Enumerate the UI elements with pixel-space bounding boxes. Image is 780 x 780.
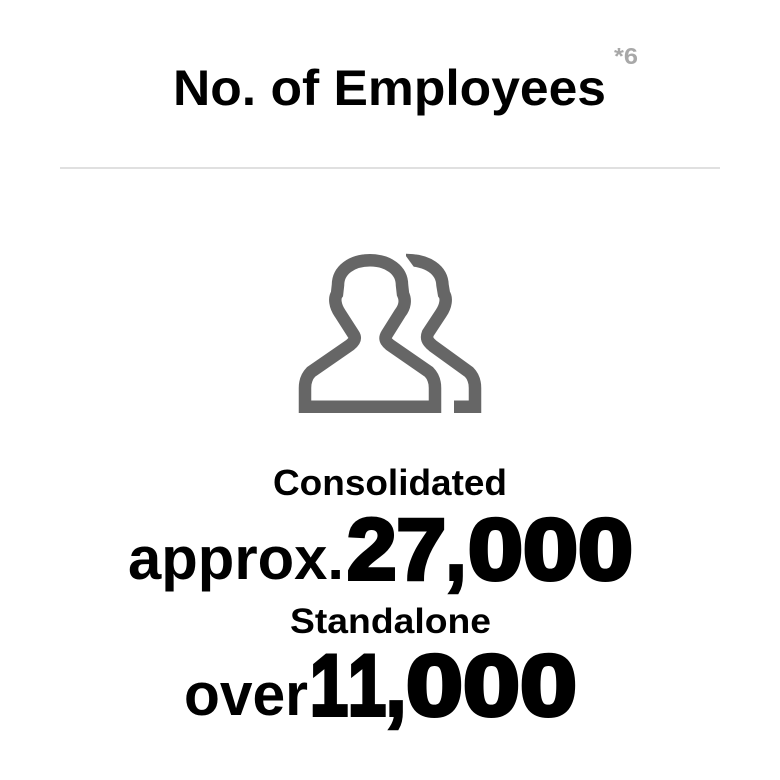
number: 11,000: 1 xyxy=(310,638,348,734)
consolidated figure xyxy=(128,462,633,598)
number: 11,000 xyxy=(310,638,577,734)
icon: two people outline xyxy=(305,252,475,407)
number: 11,000: , xyxy=(386,638,406,734)
number: 11,000: 000 xyxy=(406,638,577,734)
prefix: approx.: approx. xyxy=(128,525,344,592)
number: 27,000: 27 xyxy=(347,502,446,598)
number: 27,000: 000 xyxy=(468,502,633,598)
number: 27,000: , xyxy=(446,502,466,598)
title: No. of Employees xyxy=(173,60,606,116)
number: 11,000: 1 xyxy=(348,638,386,734)
number: 27,000 xyxy=(347,502,633,598)
standalone figure xyxy=(184,602,577,734)
label: consolidated: Consolidated xyxy=(273,462,507,503)
footnote marker: *6 xyxy=(614,43,638,69)
prefix: over: over xyxy=(184,661,308,728)
label: standalone: Standalone xyxy=(290,602,491,641)
